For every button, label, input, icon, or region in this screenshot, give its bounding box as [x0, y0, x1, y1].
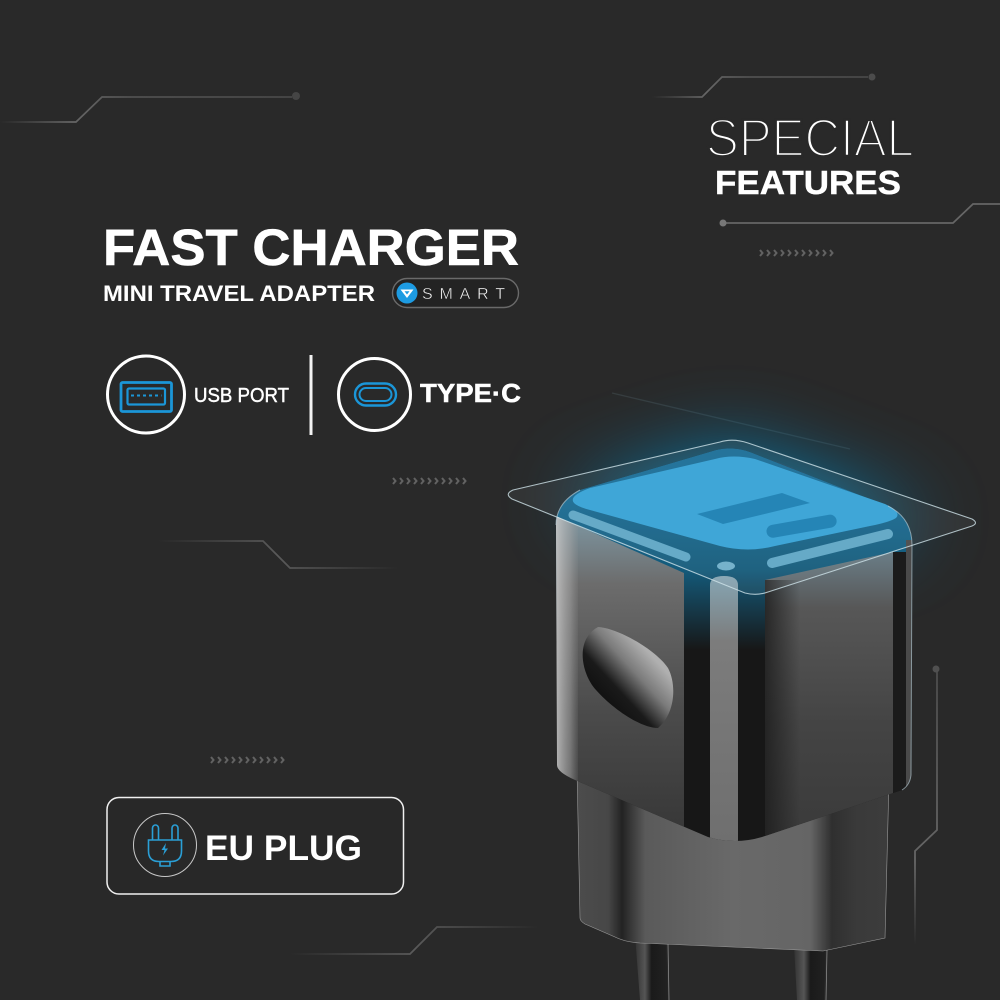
corner highlight: [717, 562, 735, 570]
heading line: features: FEATURES: [715, 164, 901, 201]
circuit line: faint behind glow: [612, 393, 850, 449]
circuit line: bottom: [290, 927, 538, 954]
rim highlights: [573, 515, 888, 563]
glass plane: [508, 440, 976, 594]
circuit line: below special features: [720, 204, 1000, 226]
logo badge: smart: [392, 278, 518, 308]
heading: special features: [706, 109, 914, 201]
circuit line: top left: [0, 92, 300, 122]
chevrons: middle: [393, 478, 466, 484]
panel: eu plug: [107, 798, 404, 894]
chevrons: lower left: [211, 757, 284, 763]
icon: plug: [134, 814, 196, 876]
chevrons: top right: [760, 250, 832, 256]
label: usb port: USB PORT: [194, 384, 289, 407]
logo wordmark: SMART: [422, 286, 505, 303]
usb slot: [697, 493, 810, 524]
product: usb charger: [508, 440, 976, 1000]
divider between ports: [310, 355, 312, 435]
cables: [635, 935, 827, 1000]
plug base: [577, 770, 889, 951]
icon: usb port: [108, 356, 184, 433]
left face: [556, 516, 684, 850]
type-c slot: [765, 514, 838, 539]
label: eu plug: EU PLUG: [205, 828, 362, 868]
left edge highlight: [556, 516, 578, 790]
circuit line: middle left: [158, 541, 398, 568]
front highlight: [710, 576, 738, 850]
logo icon: [396, 282, 418, 304]
subtitle: mini travel adapter: MINI TRAVEL ADAPTER: [103, 281, 375, 306]
right edge band: [893, 552, 906, 640]
glass outline: [556, 490, 912, 790]
top face: [573, 456, 898, 550]
right face: [765, 552, 893, 850]
label: type-c: TYPE·C: [420, 378, 521, 408]
heading line: special: SPECIAL: [706, 109, 914, 168]
circuit line: right vertical: [915, 666, 940, 945]
finger hole: [583, 627, 673, 728]
blue glow: [560, 445, 930, 575]
icon: type-c port: [338, 358, 410, 430]
upper housing: [550, 440, 920, 850]
title: fast charger: FAST CHARGER: [103, 219, 519, 276]
circuit line: top right: [652, 74, 876, 97]
